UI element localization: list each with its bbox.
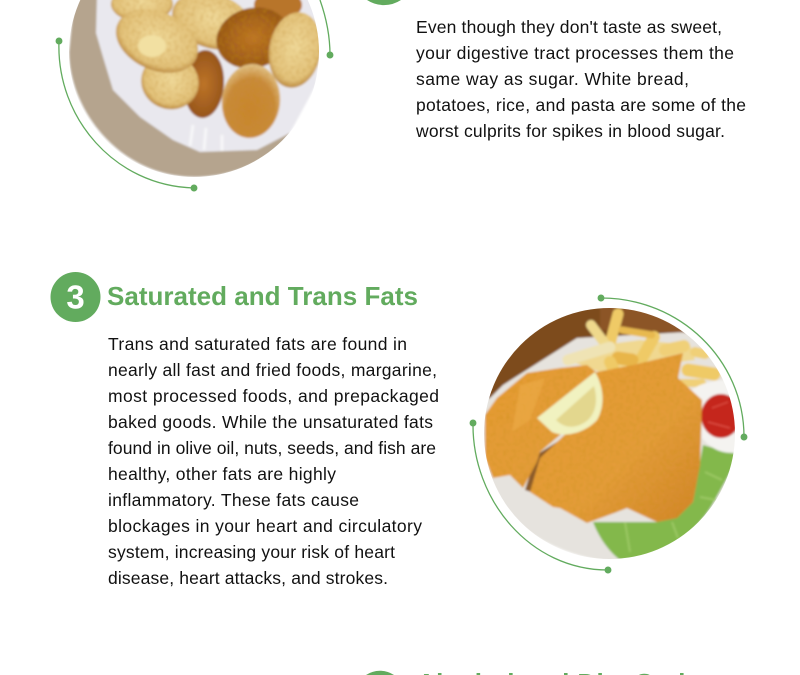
text block: saturated and trans fats: Trans and saturated fats are found in: [108, 334, 407, 354]
text block: saturated and trans fats: blockages in your heart and circulatory: [108, 516, 422, 536]
arc: lower left with dots: [56, 0, 333, 191]
number badge 3: [50, 272, 100, 322]
text block: saturated and trans fats: [108, 334, 439, 588]
number badge 4: [366, 671, 394, 675]
text block: refined carbs: your digestive tract processes them the: [416, 43, 734, 63]
text block: saturated and trans fats: system, increasing your risk of heart: [108, 542, 395, 562]
text block: refined carbs: potatoes, rice, and pasta are some of the: [416, 95, 746, 115]
text block: saturated and trans fats: most processed foods, and prepackaged: [108, 386, 439, 406]
number badge 3: 3: [66, 278, 85, 316]
bottom section: cropped badge and heading: [366, 670, 684, 675]
image: plate of toasted bread: [56, 0, 333, 191]
text block: saturated and trans fats: inflammatory. These fats cause: [108, 490, 359, 510]
text block: saturated and trans fats: healthy, other fats are highly: [108, 464, 336, 484]
text block: refined carbs: Even though they don't taste as sweet,: [416, 17, 722, 37]
image: fried schnitzel with fries: [470, 295, 747, 573]
text block: saturated and trans fats: baked goods. While the unsaturated fats: [108, 412, 433, 432]
text block: refined carbs: worst culprits for spikes in blood sugar.: [415, 121, 725, 141]
text block: saturated and trans fats: nearly all fast and fried foods, margarine,: [108, 360, 437, 380]
text block: refined carbs: [415, 17, 746, 141]
number badge 2: [367, 0, 401, 5]
text block: saturated and trans fats: found in olive oil, nuts, seeds, and fish are: [108, 438, 436, 458]
heading: saturated and trans fats: Saturated and Trans Fats: [107, 281, 418, 311]
text block: saturated and trans fats: disease, heart attacks, and strokes.: [108, 568, 388, 588]
arc: decorative ring with dots: [470, 295, 747, 573]
text block: refined carbs: same way as sugar. White bread,: [416, 69, 689, 89]
